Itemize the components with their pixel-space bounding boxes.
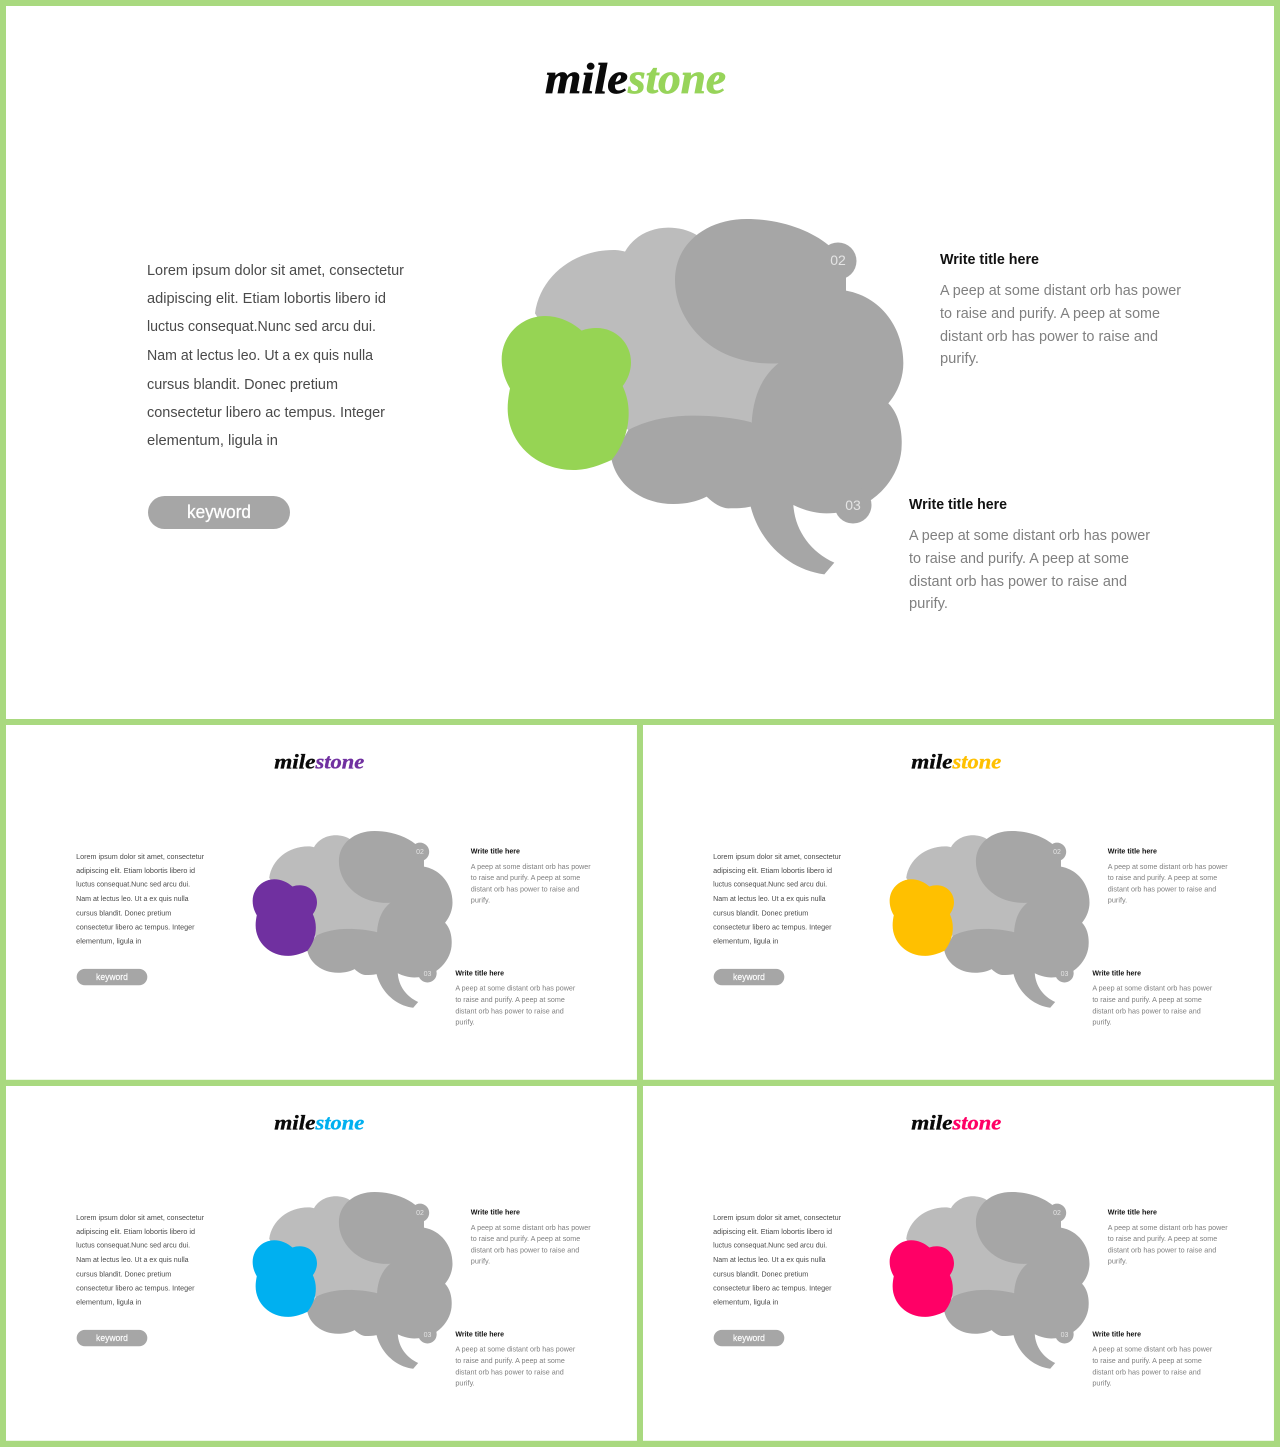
text block: item 03: distant orb has power to raise and [1092,1368,1201,1377]
text block: item 03: purify. [909,596,948,612]
brain chart [502,219,903,574]
text block: item 03: to raise and purify. A peep at some [909,551,1129,567]
brain chart: 03 [1061,971,1068,978]
text block: item 03: to raise and purify. A peep at some [455,995,565,1004]
text block: intro paragraph: cursus blandit. Donec pretium [76,909,171,918]
brain chart [253,831,453,1008]
text block: item 03: to raise and purify. A peep at some [1092,1356,1202,1365]
text block: item 02: purify. [471,896,490,905]
title: purple milestone logo: stone [314,749,365,773]
keyword button: keyword [96,972,128,982]
title: milestone logo: stone [627,56,726,103]
text block: item 02: Write title here [940,251,1039,268]
text block: item 02: purify. [1108,1257,1127,1266]
brain chart: 02 [416,1210,424,1217]
title: yellow milestone logo: stone [951,749,1002,773]
panel: pink milestone slide [643,1086,1274,1441]
panel: yellow milestone slide [643,725,1274,1080]
text block: intro paragraph: elementum, ligula in [147,433,278,449]
text block: item 02: to raise and purify. A peep at some [471,1234,580,1243]
title: blue milestone logo [274,1110,365,1134]
text block: intro paragraph: cursus blandit. Donec pretium [147,377,338,393]
text block: intro paragraph [713,1213,842,1306]
text block: intro paragraph: consectetur libero ac tempus. Integer [713,1284,832,1293]
panel: blue milestone slide [6,1086,637,1441]
text block: item 02: to raise and purify. A peep at some [471,873,580,882]
text block: intro paragraph: Lorem ipsum dolor sit amet, consectetur [76,852,205,861]
text block: item 03: Write title here [1092,968,1141,977]
text block: intro paragraph: adipiscing elit. Etiam lobortis libero id [76,866,195,875]
text block: item 03: Write title here [455,968,504,977]
title: pink milestone logo: mile [911,1110,953,1134]
marker 03 [834,486,872,524]
text block: item 02: A peep at some distant orb has power [471,1223,591,1232]
brain chart: 03 [424,971,431,978]
text block: item 03: distant orb has power to raise and [1092,1007,1201,1016]
text block: item 03 [1092,968,1213,1027]
text block: intro paragraph: luctus consequat.Nunc sed arcu dui. [147,319,376,335]
text block: item 02: to raise and purify. A peep at some [1108,1234,1217,1243]
text block: item 03: Write title here [909,496,1007,513]
text block: intro paragraph: Nam at lectus leo. Ut a ex quis nulla [76,1255,189,1264]
text block: intro paragraph: elementum, ligula in [76,936,141,945]
text block: intro paragraph [76,1213,205,1306]
text block: item 03: distant orb has power to raise and [909,574,1127,590]
text block: item 02: distant orb has power to raise and [471,885,579,894]
text block: item 02: A peep at some distant orb has power [471,862,591,871]
text block: item 03: distant orb has power to raise and [455,1368,564,1377]
title: yellow milestone logo: mile [911,749,953,773]
text block: intro paragraph: elementum, ligula in [713,936,778,945]
panel: large green milestone slide [6,6,1274,719]
text block: item 03 [1092,1329,1213,1388]
text block: intro paragraph: luctus consequat.Nunc sed arcu dui. [76,1241,190,1250]
brain: highlighted green lobe [502,316,631,470]
text block: item 02: Write title here [1108,846,1157,855]
keyword button: keyword [733,972,765,982]
keyword button [714,969,784,985]
text block: item 02 [471,846,591,905]
brain chart: 02 [1053,849,1061,856]
text block: intro paragraph: cursus blandit. Donec pretium [713,1270,808,1279]
text block: intro paragraph: Nam at lectus leo. Ut a ex quis nulla [76,894,189,903]
text block: item 02: A peep at some distant orb has power [1108,1223,1228,1232]
text block: intro paragraph: Nam at lectus leo. Ut a ex quis nulla [713,1255,826,1264]
brain: dark grey lobes [612,219,903,574]
text block: intro paragraph: Nam at lectus leo. Ut a ex quis nulla [147,348,374,364]
title: blue milestone logo: mile [274,1110,316,1134]
text block: item 02 [471,1207,591,1266]
keyword button: keyword [733,1333,765,1343]
keyword button [714,1330,784,1346]
brain chart [890,831,1090,1008]
brain: highlighted purple lobe [253,879,317,956]
marker 02 [820,242,856,280]
title: purple milestone logo: mile [274,749,316,773]
text block: item 02: purify. [471,1257,490,1266]
text block: item 03: A peep at some distant orb has power [1092,1345,1213,1354]
text block: item 02 [1108,1207,1228,1266]
text block: intro paragraph: adipiscing elit. Etiam lobortis libero id [713,1227,832,1236]
keyword button [77,969,147,985]
text block: item 02: A peep at some distant orb has power [940,283,1181,299]
text block: item 03: distant orb has power to raise and [455,1007,564,1016]
text block: intro paragraph: elementum, ligula in [713,1297,778,1306]
text block: item 02: to raise and purify. A peep at some [940,306,1160,322]
text block: intro paragraph [713,852,842,945]
text block: item 03 [455,968,576,1027]
text block: item 03: purify. [455,1018,475,1027]
text block: intro paragraph: adipiscing elit. Etiam lobortis libero id [713,866,832,875]
title: milestone logo [545,56,726,103]
text block: item 02: purify. [940,351,979,367]
text block: item 02: Write title here [471,1207,520,1216]
text block: intro paragraph [147,263,404,449]
keyword button [77,1330,147,1346]
text block: intro paragraph: luctus consequat.Nunc sed arcu dui. [713,880,827,889]
text block: intro paragraph: elementum, ligula in [76,1297,141,1306]
panel: purple milestone slide [6,725,637,1080]
text block: intro paragraph: Nam at lectus leo. Ut a ex quis nulla [713,894,826,903]
text block: item 02: distant orb has power to raise and [471,1246,579,1255]
title: pink milestone logo [911,1110,1002,1134]
text block: item 03: Write title here [455,1329,504,1338]
brain chart [253,1192,453,1369]
text block: item 03: to raise and purify. A peep at some [455,1356,565,1365]
text block: item 03 [909,496,1150,612]
text block: item 02: distant orb has power to raise and [940,329,1158,345]
keyword button [148,496,290,529]
text block: item 02: to raise and purify. A peep at some [1108,873,1217,882]
text block: item 03: A peep at some distant orb has power [909,528,1150,544]
text block: item 03: A peep at some distant orb has power [455,1345,576,1354]
brain: highlighted blue lobe [253,1240,317,1317]
text block: intro paragraph: adipiscing elit. Etiam lobortis libero id [147,291,386,307]
text block: item 02: distant orb has power to raise and [1108,885,1216,894]
title: purple milestone logo [274,749,365,773]
brain: light grey lobe [535,228,778,430]
text block: intro paragraph [76,852,205,945]
keyword button: keyword [187,502,251,522]
text block: item 02: purify. [1108,896,1127,905]
text block: item 03: purify. [1092,1379,1112,1388]
text block: item 03: Write title here [1092,1329,1141,1338]
text block: item 03: A peep at some distant orb has power [455,984,576,993]
text block: item 03: purify. [1092,1018,1112,1027]
brain chart: 03 [424,1332,431,1339]
text block: intro paragraph: luctus consequat.Nunc sed arcu dui. [713,1241,827,1250]
brain: highlighted yellow lobe [890,879,954,956]
text block: item 02 [940,251,1181,367]
text block: intro paragraph: Lorem ipsum dolor sit amet, consectetur [713,1213,842,1222]
brain chart: 02 [416,849,424,856]
text block: intro paragraph: cursus blandit. Donec pretium [713,909,808,918]
title: milestone logo: mile [545,56,628,103]
text block: item 02: distant orb has power to raise and [1108,1246,1216,1255]
text block: intro paragraph: consectetur libero ac tempus. Integer [76,923,195,932]
text block: intro paragraph: Lorem ipsum dolor sit amet, consectetur [713,852,842,861]
brain chart: 02 [1053,1210,1061,1217]
text block: intro paragraph: Lorem ipsum dolor sit amet, consectetur [76,1213,205,1222]
title: yellow milestone logo [911,749,1002,773]
text block: intro paragraph: consectetur libero ac tempus. Integer [713,923,832,932]
text block: intro paragraph: consectetur libero ac tempus. Integer [76,1284,195,1293]
brain chart [890,1192,1090,1369]
text block: intro paragraph: adipiscing elit. Etiam lobortis libero id [76,1227,195,1236]
text block: intro paragraph: Lorem ipsum dolor sit amet, consectetur [147,263,404,279]
text block: item 02: Write title here [471,846,520,855]
text block: item 03 [455,1329,576,1388]
keyword button: keyword [96,1333,128,1343]
title: pink milestone logo: stone [951,1110,1002,1134]
text block: item 03: to raise and purify. A peep at some [1092,995,1202,1004]
text block: item 03: A peep at some distant orb has power [1092,984,1213,993]
marker 03: 03 [845,497,861,513]
marker 02: 02 [830,252,846,268]
text block: item 03: purify. [455,1379,475,1388]
text block: intro paragraph: consectetur libero ac tempus. Integer [147,405,385,421]
text block: item 02: Write title here [1108,1207,1157,1216]
text block: item 02: A peep at some distant orb has power [1108,862,1228,871]
brain: highlighted pink lobe [890,1240,954,1317]
text block: intro paragraph: cursus blandit. Donec pretium [76,1270,171,1279]
title: blue milestone logo: stone [314,1110,365,1134]
text block: intro paragraph: luctus consequat.Nunc sed arcu dui. [76,880,190,889]
brain chart: 03 [1061,1332,1068,1339]
text block: item 02 [1108,846,1228,905]
